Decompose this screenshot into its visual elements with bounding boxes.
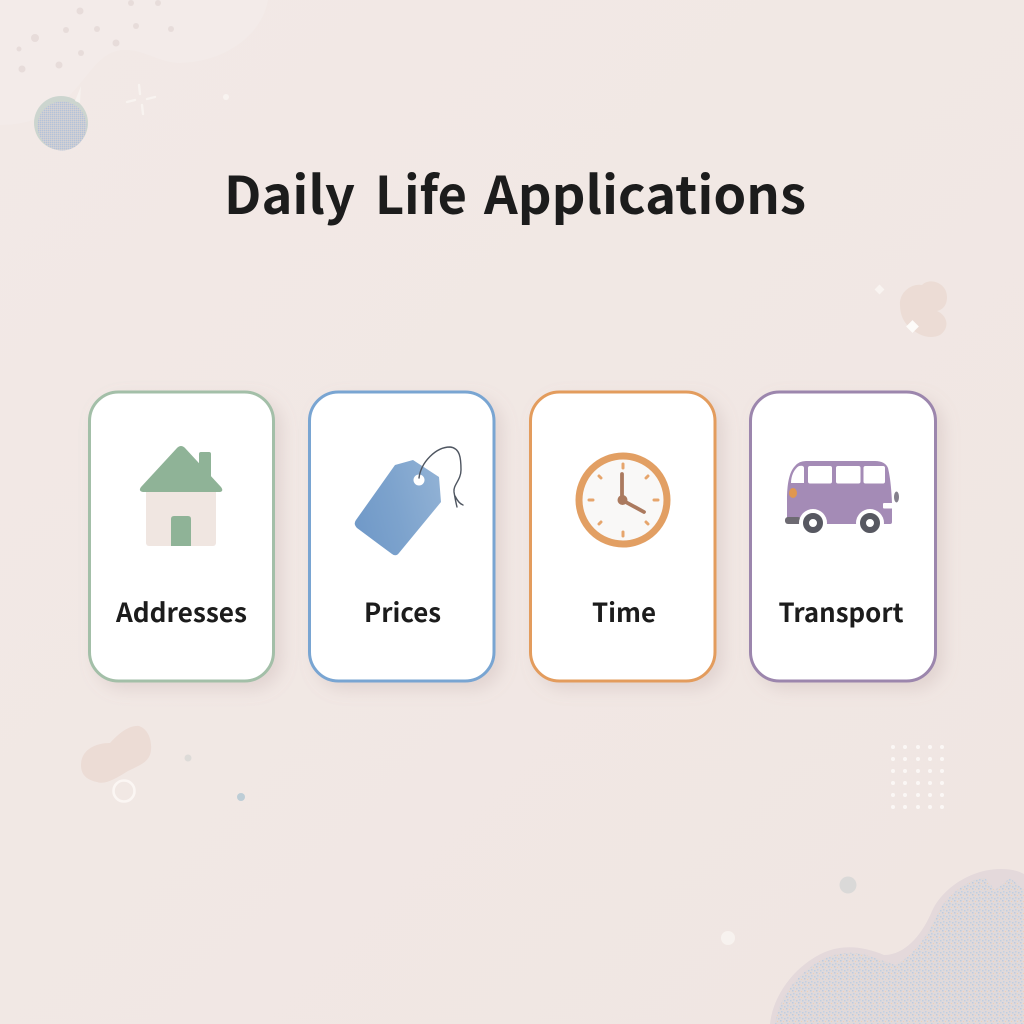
label: Addresses: Addresses <box>115 593 247 630</box>
decoration: sparkle <box>127 85 155 114</box>
card: Addresses <box>90 392 274 681</box>
decoration: bottom-right blob <box>770 869 1024 1024</box>
decoration: top-left pale blob <box>0 0 268 125</box>
icon: clock <box>579 456 667 544</box>
decoration: top-left globe <box>34 86 88 150</box>
card: Prices <box>310 392 494 681</box>
decoration: top-left dots <box>16 0 174 72</box>
decoration: dot grid <box>891 745 944 809</box>
title: Life <box>375 154 467 229</box>
label: Prices: Prices <box>364 593 441 630</box>
decoration: small dot <box>223 94 229 100</box>
icon: house <box>140 446 222 546</box>
title: Applications <box>483 154 806 229</box>
decoration: lower-left blob and ring <box>81 726 245 802</box>
card: Transport <box>750 392 936 681</box>
card: Time <box>530 392 715 681</box>
icon: bus <box>785 461 899 537</box>
decoration: small circles lower right <box>721 876 856 945</box>
icon: price tag <box>355 447 463 555</box>
title: Daily <box>224 154 355 229</box>
decoration: right peanut blob <box>875 281 947 337</box>
label: Time: Time <box>592 593 656 630</box>
label: Transport: Transport <box>778 593 904 630</box>
